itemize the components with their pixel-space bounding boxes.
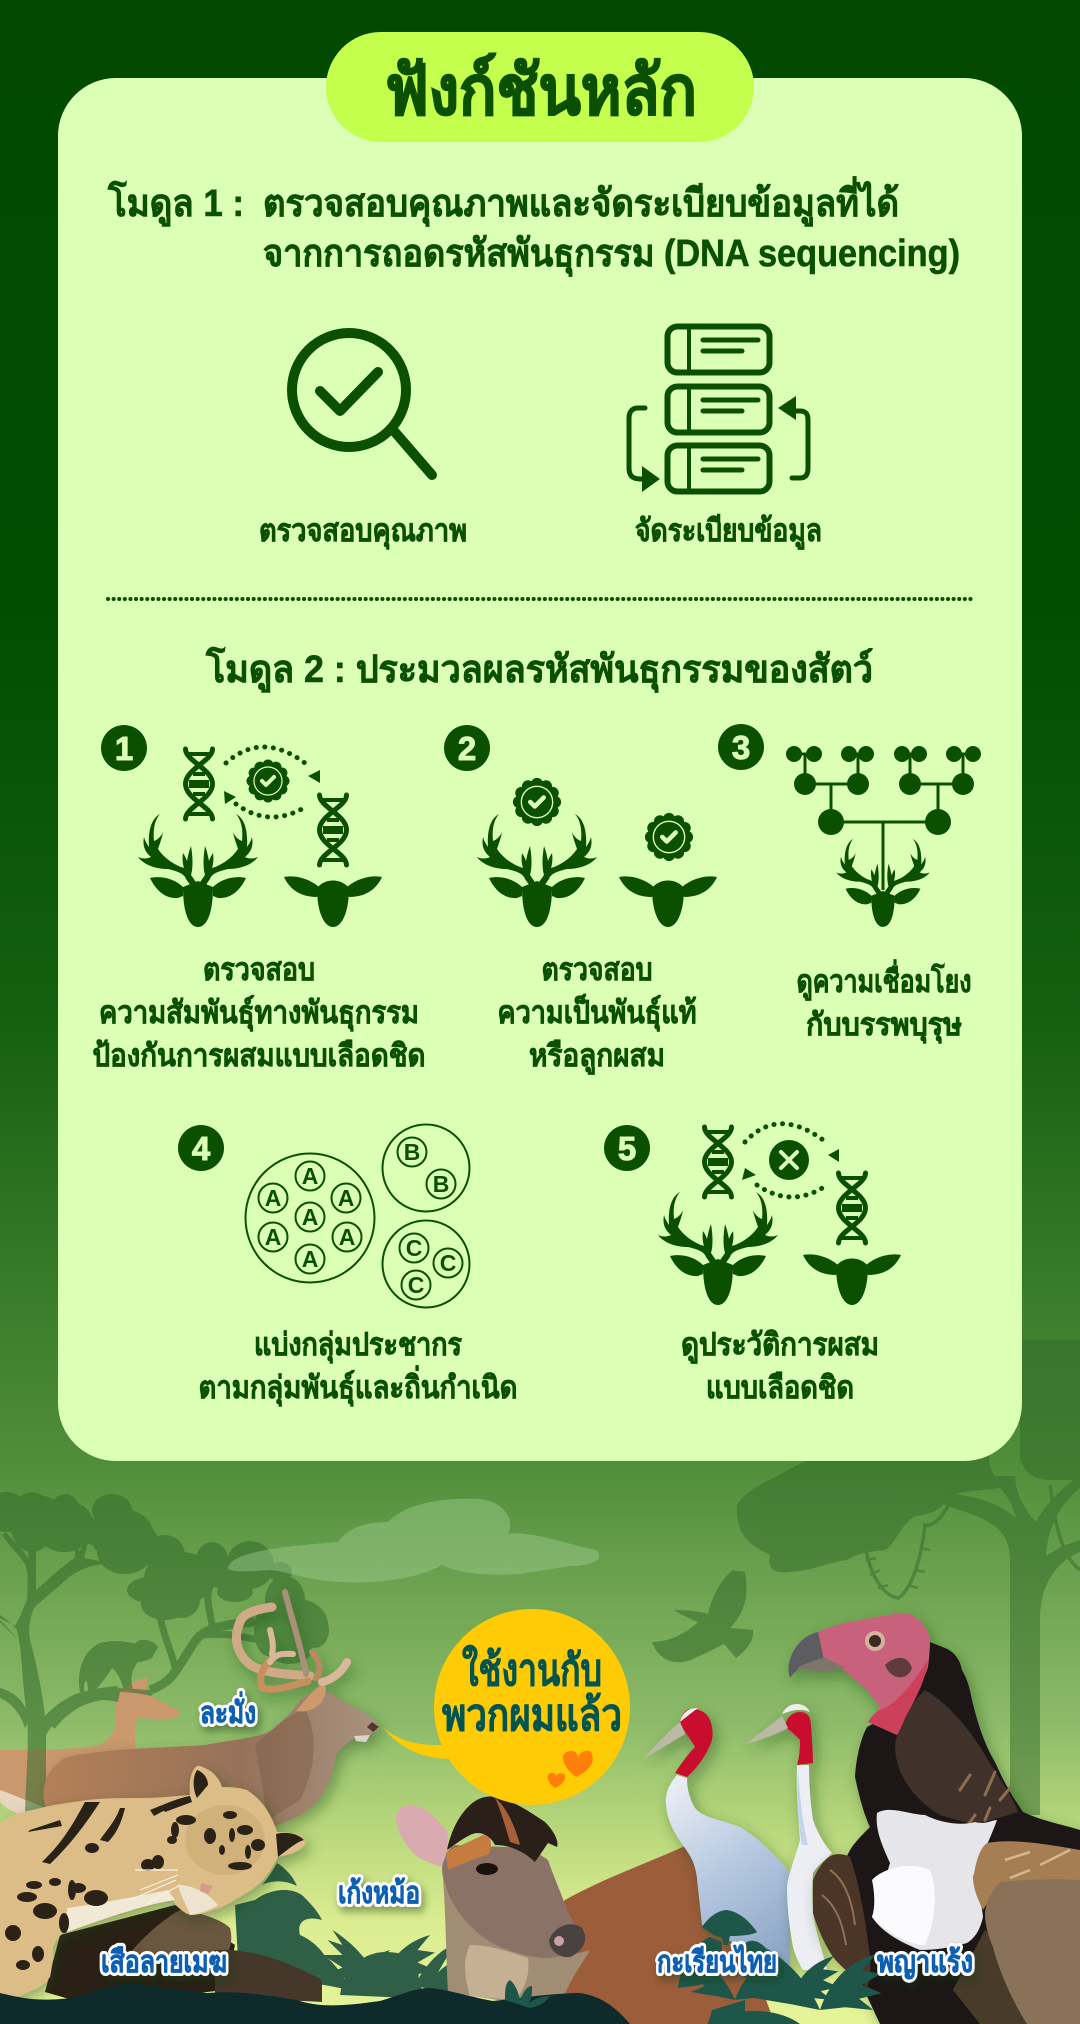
- label: ละมั่ง: ละมั่ง: [200, 1691, 256, 1730]
- text 1: ป้องกันการผสมแบบเลือดชิด: [92, 1038, 426, 1073]
- icon: deer pair with DNA and cross: [658, 1124, 901, 1305]
- text 2: [498, 952, 696, 1075]
- item 3: [718, 724, 981, 1044]
- icon: magnifier check: [292, 333, 432, 475]
- right tree crown: [737, 1450, 1000, 1573]
- text 4: [198, 1327, 518, 1407]
- muntjac head: [442, 1845, 585, 1958]
- panel: module 2: [92, 646, 981, 1407]
- module 1 heading: จากการถอดรหัสพันธุกรรม (DNA sequencing): [263, 233, 960, 277]
- ground: [0, 1983, 630, 2024]
- animal labels: [101, 1691, 973, 1980]
- leopard muzzle: [178, 1885, 218, 1915]
- leopard whiskers: [130, 1870, 180, 1905]
- label: พญาแร้ง: พญาแร้ง: [877, 1946, 973, 1980]
- number 2: 2: [458, 730, 476, 767]
- female deer (ละมั่ง): [0, 1678, 179, 1815]
- label: เสือลายเมฆ: เสือลายเมฆ: [101, 1946, 227, 1979]
- vulture left wing: [813, 1854, 870, 1987]
- text 5: ดูประวัติการผสม: [681, 1327, 879, 1364]
- bubble tail: [384, 1728, 460, 1759]
- label: เสือลายเมฆ: เสือลายเมฆ: [101, 1946, 227, 1979]
- eagle silhouette: [652, 1570, 753, 1662]
- panel: module 1: [107, 176, 960, 550]
- muntjac neck: [443, 1877, 590, 2010]
- label: กะเรียนไทย: กะเรียนไทย: [657, 1944, 777, 1979]
- text 3: [796, 959, 972, 1044]
- label: จัดระเบียบข้อมูล: จัดระเบียบข้อมูล: [635, 513, 822, 550]
- tree silhouette right: [737, 1340, 1080, 1815]
- icon: population groups: C: [440, 1250, 456, 1276]
- leopard head shading: [185, 1805, 265, 1875]
- label: ตรวจสอบคุณภาพ: ตรวจสอบคุณภาพ: [259, 513, 467, 550]
- vulture lower wing: [953, 1930, 1027, 2024]
- hanging vines: [866, 1480, 958, 1598]
- item 1: [92, 725, 426, 1073]
- left tree crown 1: [0, 1492, 28, 1532]
- icon: population groups: B: [404, 1139, 420, 1165]
- speech bubble: พวกผมแล้ว: [442, 1691, 622, 1740]
- foliage left: [235, 1863, 465, 1998]
- module 2 heading: โมดูล 2 : ประมวลผลรหัสพันธุกรรมของสัตว์: [205, 646, 873, 693]
- icon: population groups: A: [302, 1204, 318, 1230]
- icon: sort documents: [629, 326, 808, 492]
- text 2: ความเป็นพันธุ์แท้: [498, 993, 696, 1032]
- text 5: [681, 1327, 879, 1405]
- number 4: [178, 1125, 224, 1171]
- icon: population groups: A: [265, 1185, 281, 1211]
- text 1: ความสัมพันธุ์ทางพันธุกรรม: [99, 995, 419, 1032]
- icon: population groups: C: [408, 1272, 424, 1298]
- icon: pedigree tree with deer: [786, 746, 981, 927]
- icon: population groups: A: [302, 1246, 318, 1272]
- muntjac hair: [447, 1796, 558, 1862]
- vulture white chest: [872, 1810, 997, 1950]
- vulture head: [818, 1613, 930, 1735]
- sarus crane 2 (กระเรียนไทย): [746, 1704, 832, 1970]
- icon: deer pair with badges: [477, 778, 717, 927]
- muntjac orange patch: [446, 1832, 491, 1870]
- main panel: [58, 78, 1022, 1461]
- icon: population groups: [246, 1124, 470, 1308]
- vulture eye: [865, 1631, 885, 1651]
- title: ฟังก์ชันหลัก: [385, 53, 697, 129]
- muntjac ear: [396, 1805, 448, 1867]
- number 5: 5: [618, 1130, 636, 1167]
- number 3: 3: [732, 729, 750, 766]
- number 1: 1: [115, 730, 133, 767]
- red-headed vulture (พญาแร้ง): [789, 1613, 1080, 2024]
- monkey silhouette: [79, 1640, 158, 1692]
- leopard white belly: [67, 1890, 175, 1932]
- muntjac eye: [476, 1863, 498, 1875]
- item 4: [178, 1124, 518, 1407]
- foliage right: [678, 1910, 882, 2024]
- muntjac body: [520, 1846, 775, 2024]
- log: [45, 1905, 322, 2005]
- label: ละมั่ง: ละมั่ง: [200, 1691, 256, 1730]
- label: เก้งหม้อ: เก้งหม้อ: [338, 1877, 420, 1910]
- vulture right wing: [973, 1841, 1080, 1910]
- number 2: [444, 725, 490, 771]
- label: พญาแร้ง: พญาแร้ง: [877, 1946, 973, 1980]
- vulture body: [840, 1640, 1080, 2024]
- vulture beak: [789, 1632, 824, 1678]
- stag ear: [296, 1683, 326, 1711]
- text 2: หรือลูกผสม: [529, 1038, 665, 1075]
- bubble circle: [434, 1609, 630, 1805]
- module 1 heading: โมดูล 1 :: [107, 180, 244, 227]
- tree silhouette left: [0, 1492, 329, 1815]
- text 3: กับบรรพบุรุษ: [806, 1007, 962, 1044]
- speech bubble: [384, 1609, 630, 1805]
- stag (ละมั่ง): [44, 1592, 379, 1826]
- icon: population groups: B: [433, 1171, 449, 1197]
- icon: deer pair with DNA and badge: [138, 747, 382, 927]
- stag body: [44, 1692, 379, 1826]
- number 4: 4: [192, 1130, 211, 1167]
- muntjac foreground plant: [505, 1980, 550, 2008]
- icon: population groups: A: [338, 1185, 354, 1211]
- muntjac (เก้งหม้อ): [396, 1796, 775, 2024]
- bubble text: ใช้งานกับ: [462, 1644, 602, 1695]
- icon: population groups: A: [302, 1163, 318, 1189]
- number 5: [604, 1125, 650, 1171]
- left tree crown 2: [145, 1535, 185, 1575]
- label: เก้งหม้อ: เก้งหม้อ: [338, 1877, 420, 1910]
- vulture brown mantle: [895, 1690, 1018, 1825]
- text 2: ตรวจสอบ: [542, 952, 652, 987]
- text 1: [92, 952, 426, 1073]
- icon: hearts: [548, 1751, 593, 1788]
- text 4: แบ่งกลุ่มประชากร: [254, 1327, 462, 1364]
- stag antlers: [236, 1592, 347, 1689]
- item 2: [444, 725, 717, 1075]
- clouded leopard (เสือลายเมฆ): [0, 1766, 306, 1998]
- icon: population groups: C: [406, 1235, 422, 1261]
- number 1: [101, 725, 147, 771]
- title pill: [326, 32, 754, 142]
- text 1: ตรวจสอบ: [203, 952, 315, 987]
- icon: population groups: A: [339, 1224, 355, 1250]
- cloud: [228, 1499, 599, 1582]
- number 3: [718, 724, 764, 770]
- icon: population groups: A: [265, 1224, 281, 1250]
- text 3: ดูความเชื่อมโยง: [796, 959, 972, 1001]
- module 1 heading: [107, 176, 960, 277]
- module 1 heading: ตรวจสอบคุณภาพและจัดระเบียบข้อมูลที่ได้: [263, 176, 899, 227]
- item 5: [604, 1124, 901, 1405]
- sarus crane 1 (กระเรียนไทย): [643, 1708, 790, 1975]
- text 4: ตามกลุ่มพันธุ์และถิ่นกำเนิด: [198, 1365, 518, 1407]
- muntjac nose: [549, 1924, 585, 1957]
- label: กะเรียนไทย: กะเรียนไทย: [657, 1944, 777, 1979]
- left tree 2 branches: [150, 1622, 255, 1690]
- text 5: แบบเลือดชิด: [706, 1370, 854, 1405]
